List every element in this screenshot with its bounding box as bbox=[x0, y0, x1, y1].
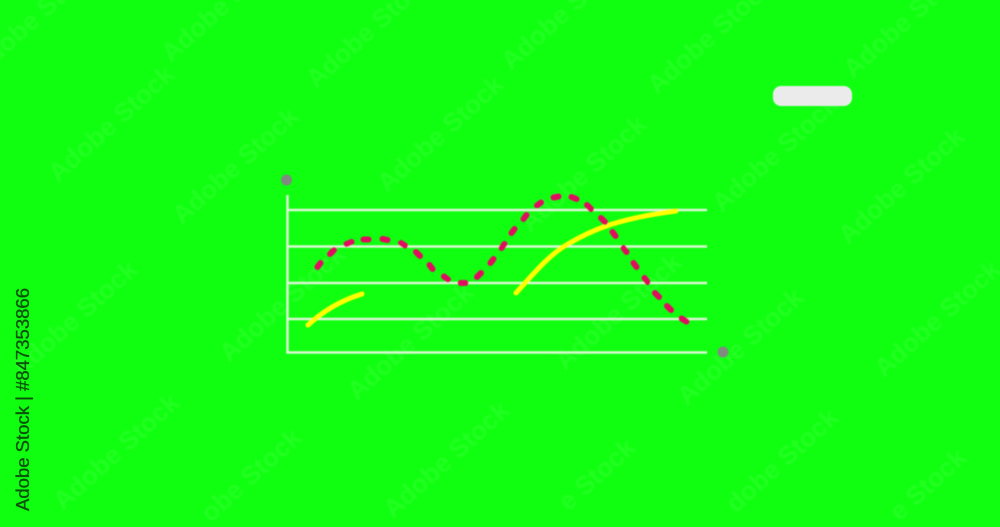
watermark pattern: dobe Stock bbox=[720, 402, 844, 518]
watermark pattern: Adobe Stock bbox=[377, 395, 515, 524]
watermark pattern: Adobe Stock bbox=[671, 282, 809, 411]
watermark pattern: Adobe Stock bbox=[341, 277, 479, 406]
watermark pattern: Adobe Stock bbox=[514, 109, 652, 238]
watermark pattern: Adobe Stock bbox=[47, 387, 185, 516]
watermark pattern: Adobe Stock bbox=[371, 69, 509, 198]
vertical credit text: Adobe Stock | #847353866 bbox=[13, 288, 33, 511]
watermark pattern: e Stock bbox=[552, 432, 641, 516]
watermark pattern: obe Stock bbox=[195, 422, 307, 527]
watermark pattern: Adobe Stock bbox=[5, 254, 143, 383]
watermark pattern: Adobe Stock bbox=[42, 59, 180, 188]
watermark pattern: Adobe Stock bbox=[832, 121, 970, 250]
watermark pattern: Adobe Stock bbox=[549, 247, 687, 376]
watermark pattern: Adobe Stock bbox=[213, 239, 351, 368]
yellow line: first segment bbox=[308, 294, 362, 325]
watermark pattern: e Stock bbox=[883, 442, 972, 526]
axis end dot: top bbox=[281, 174, 292, 186]
chart axes and grid lines bbox=[288, 195, 707, 352]
watermark pattern: Adobe Stock bbox=[166, 101, 304, 230]
watermark pattern: Adobe Stock bbox=[706, 89, 844, 218]
pink dashed line bbox=[318, 196, 686, 322]
line chart bbox=[281, 174, 728, 358]
yellow line: second segment bbox=[516, 211, 676, 293]
pill button bbox=[773, 86, 852, 106]
axis end dot: right bbox=[718, 346, 728, 358]
